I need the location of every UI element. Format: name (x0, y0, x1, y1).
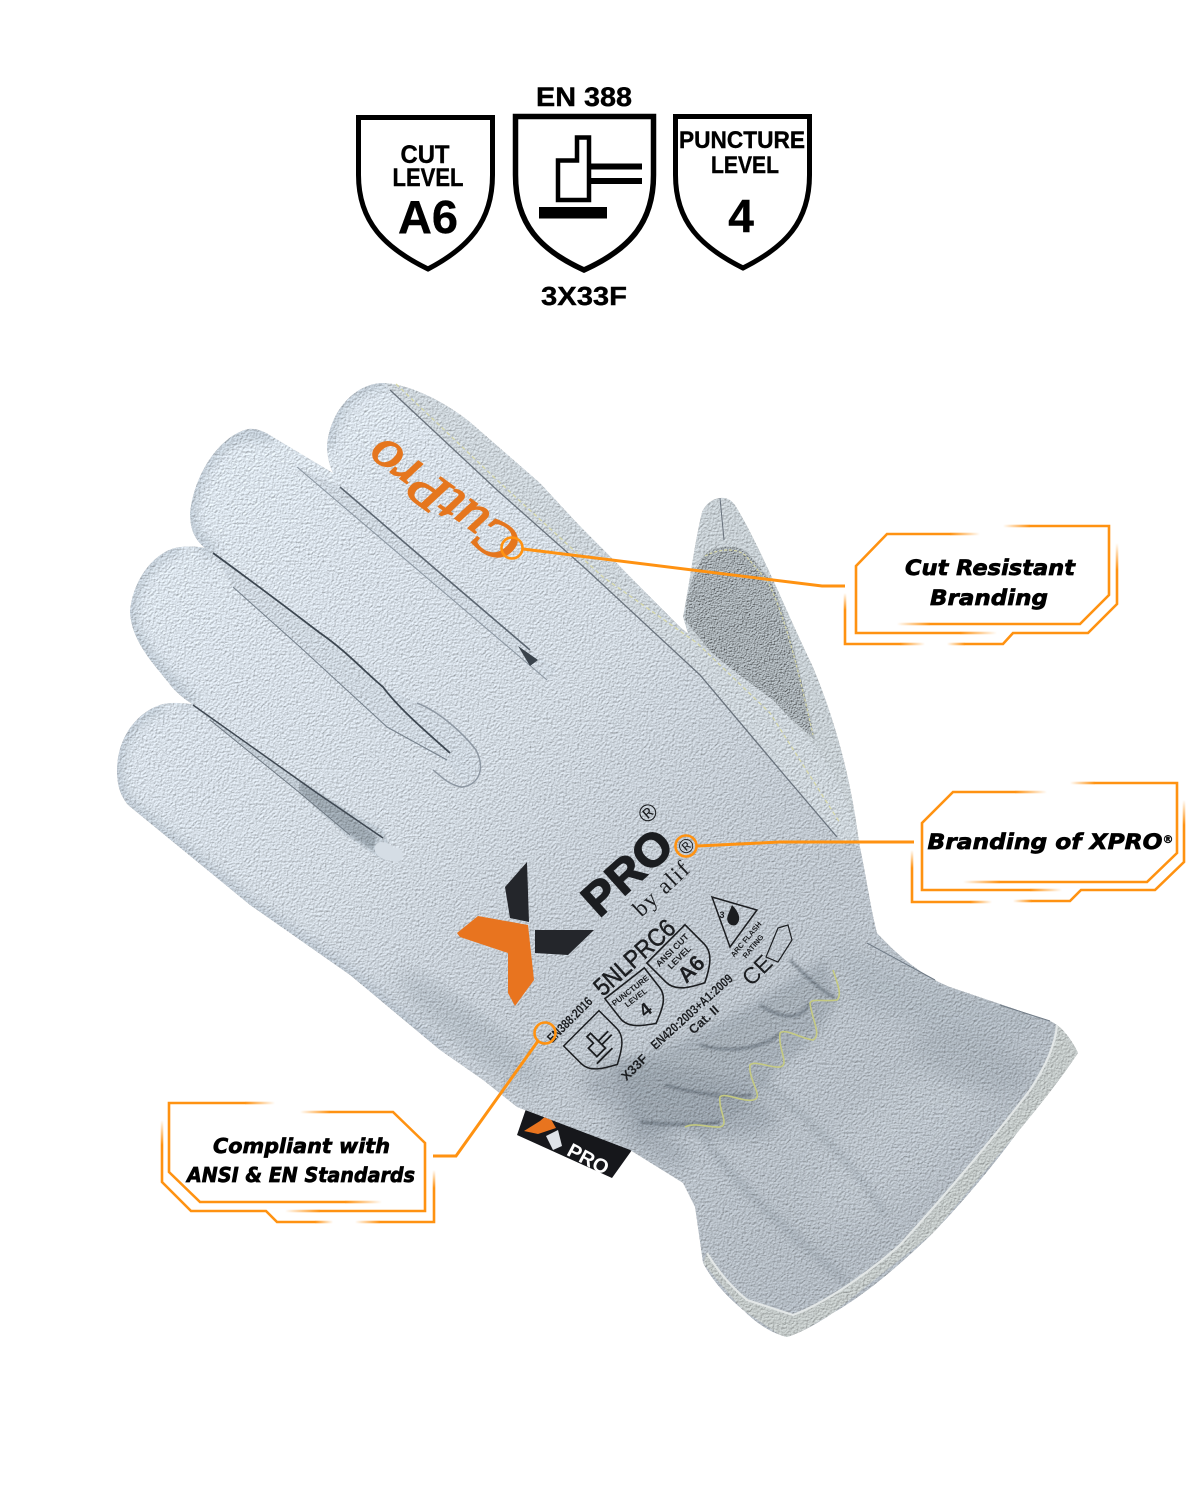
logo: XPRO by alif: by alif (628, 856, 695, 921)
badge: cut level A6: CUT (400, 141, 450, 169)
printed shield A6 (647, 925, 724, 1002)
cuff band (703, 1023, 1082, 1340)
leader line: cut resistant branding (502, 538, 845, 586)
logo: XPRO by alif (457, 797, 700, 1006)
arc flash triangle: RATING (741, 933, 766, 960)
badge: cut level A6: LEVEL (392, 164, 464, 192)
index finger side band (385, 383, 860, 847)
printed shield A6: ANSI CUT (654, 931, 691, 969)
wrist gather stitching (685, 970, 839, 1127)
logo: XPRO by alif: PRO (571, 818, 683, 926)
hang tag (517, 1106, 632, 1180)
arc flash triangle (712, 897, 766, 960)
callout: compliant with ANSI and EN standards: ANSI & EN Standards (185, 1163, 415, 1187)
callout: branding of XPRO: Branding of XPRO (928, 830, 1163, 854)
badge: puncture level 4: LEVEL (711, 152, 779, 179)
printed shield 4: PUNCTURE (610, 973, 651, 1008)
badge: puncture level 4: 4 (728, 190, 754, 242)
badge: puncture level 4 (676, 116, 810, 268)
cuff stitch (707, 1025, 1057, 1315)
printed standards marks: EN388:2016 (544, 994, 595, 1045)
badge: puncture level 4: PUNCTURE (679, 127, 805, 154)
logo: XPRO by alif: ® (674, 833, 700, 860)
finger gap: ring and little (193, 705, 403, 863)
callout: cut resistant branding: Cut Resistant (905, 556, 1076, 580)
code: 3X33F: 3X33F (541, 281, 627, 311)
callout: cut resistant branding: Branding (930, 586, 1048, 610)
wrist seam (867, 943, 1050, 1021)
callout: compliant with ANSI and EN standards: Compliant with (213, 1134, 390, 1158)
leader line: standards compliance (433, 1022, 556, 1156)
embroidery: CutPro: CutPro (354, 425, 532, 577)
glove (117, 383, 1082, 1340)
printed shield 4: LEVEL (623, 986, 649, 1009)
printed shield 4 (605, 968, 676, 1039)
printed standards marks: CE (737, 950, 777, 990)
arc flash triangle: 3 (719, 910, 725, 920)
printed shield EN 388 (564, 1011, 635, 1082)
logo mark (457, 862, 594, 1006)
printed shield 4: 4 (635, 999, 657, 1022)
callout: branding of XPRO (911, 782, 1185, 903)
back of hand and fingers (117, 383, 1082, 1340)
certification badges (358, 82, 810, 311)
finger gap: index and middle (297, 467, 547, 680)
badge: cut level A6: A6 (398, 191, 458, 243)
printed standards marks: X33F (618, 1051, 651, 1084)
leader line: branding of XPRO (676, 836, 914, 856)
callout: compliant with ANSI and EN standards (161, 1102, 435, 1223)
finger gap: middle and ring (213, 553, 480, 787)
heading: EN 388: EN 388 (536, 82, 632, 112)
logo: XPRO by alif: ® (633, 797, 664, 829)
index seam and stitching (390, 384, 840, 837)
thumb (683, 498, 860, 850)
printed standards marks: 5NLPRC6 (588, 914, 681, 1002)
printed standards marks: Cat. II (685, 1002, 722, 1037)
printed standards marks: EN420:2003+A1:2009 (648, 971, 736, 1052)
printed shield A6: A6 (672, 950, 710, 988)
callout: cut resistant branding (844, 525, 1118, 645)
badge: EN 388 hand and hammer (516, 116, 654, 270)
callout: branding of XPRO: ® (1162, 833, 1174, 846)
arc flash triangle: ARC FLASH (729, 920, 763, 959)
printed standards marks (544, 897, 792, 1084)
hang tag: PRO (563, 1140, 612, 1180)
badge: cut level A6 (358, 118, 492, 269)
printed shield A6: LEVEL (666, 943, 693, 971)
leather shading (117, 383, 1082, 1340)
finger gussets (217, 558, 356, 681)
